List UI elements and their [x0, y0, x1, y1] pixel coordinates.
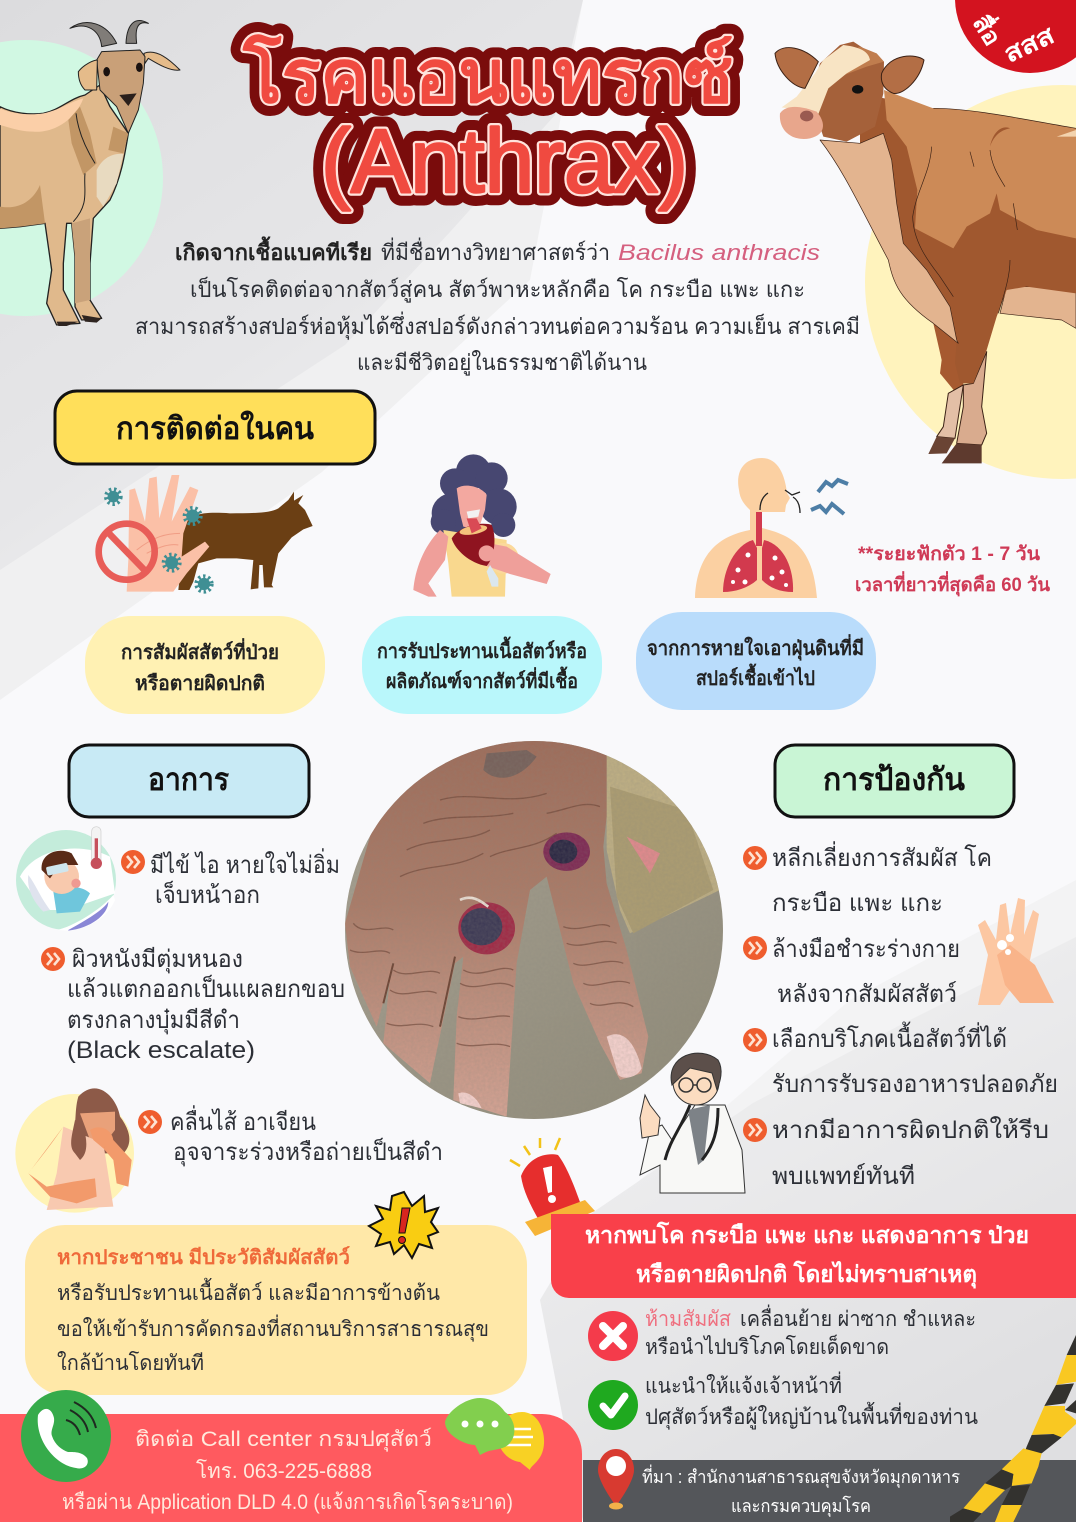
icon: phone: [21, 1390, 111, 1482]
symptoms text: แล้วแตกออกเป็นแผลยกขอบ: [67, 974, 345, 1003]
mint circle behind goat: [0, 40, 163, 316]
card: contact: หรือตายผิดปกติ: [135, 672, 265, 695]
card: inhalation: สปอร์เชื้อเข้าไป: [696, 663, 815, 690]
card: inhalation: จากการหายใจเอาฝุ่นดินที่มี: [647, 633, 864, 661]
text: prohibited actions: เคลื่อนย้าย ผ่าซาก ชำแหละ: [740, 1304, 976, 1331]
icon: warning burst: [369, 1192, 438, 1258]
badge: source: สื่อ: [967, 8, 1010, 51]
prevention text: เลือกบริโภคเนื้อสัตว์ที่ได้: [772, 1021, 1007, 1053]
icon: map pin: [598, 1449, 634, 1510]
intro text block: และมีชีวิตอยู่ในธรรมชาติได้นาน: [357, 350, 647, 376]
card: public advice: หรือรับประทานเนื้อสัตว์ และมีอาการข้างต้น: [57, 1278, 440, 1305]
intro text block: [135, 236, 860, 376]
text: prohibited actions: [645, 1304, 976, 1359]
intro text block: เป็นโรคติดต่อจากสัตว์สู่คน สัตว์พาหะหลักคือ โค กระบือ แพะ แกะ: [190, 275, 805, 303]
prevention text: หลังจากสัมผัสสัตว์: [777, 980, 957, 1008]
title: (Anthrax): [321, 112, 688, 212]
card: public advice: ขอให้เข้ารับการคัดกรองที่สถานบริการสาธารณสุข: [57, 1314, 489, 1342]
card: public advice: ใกล้บ้านโดยทันที: [57, 1351, 204, 1375]
prevention text: [772, 841, 1058, 1190]
icon: child with fever: [16, 827, 116, 931]
panel: source footer: [583, 1460, 1076, 1522]
heading: prevention: [775, 745, 1014, 817]
card: contact: การสัมผัสสัตว์ที่ป่วย: [121, 637, 279, 664]
card: eating: ผลิตภัณฑ์จากสัตว์ที่มีเชื้อ: [386, 666, 578, 693]
title: (Anthrax): [321, 112, 688, 212]
panel: warning heading: [551, 1214, 1076, 1298]
card: eating: [362, 616, 602, 714]
prevention text: ล้างมือชำระร่างกาย: [772, 936, 960, 963]
badge: source: สสส: [1000, 21, 1059, 68]
icon: woman eating raw meat: [413, 454, 551, 597]
text: recommended action: [645, 1371, 978, 1430]
panel: contact footer: โทร. 063-225-6888: [196, 1459, 372, 1483]
illustration: cow: [775, 42, 1076, 463]
panel: contact footer: [0, 1414, 582, 1522]
heading: transmission: การติดต่อในคน: [116, 410, 314, 446]
card: contact: [85, 616, 325, 714]
card: eating: การรับประทานเนื้อสัตว์หรือ: [377, 636, 587, 663]
heading: symptoms: [69, 745, 309, 817]
prevention text: พบแพทย์ทันที: [772, 1162, 915, 1190]
intro text block: Bacilus anthracis: [618, 240, 820, 265]
panel: contact footer: ติดต่อ Call center กรมปศุสัตว์: [135, 1427, 432, 1452]
prevention text: กระบือ แพะ แกะ: [772, 890, 943, 917]
panel: source footer: ที่มา : สำนักงานสาธารณสุขจังหวัดมุกดาหาร: [642, 1464, 960, 1488]
symptoms text: ตรงกลางบุ๋มมีสีดำ: [67, 1007, 240, 1035]
card: public advice: หากประชาชน มีประวัติสัมผัสสัตว์: [57, 1246, 350, 1269]
intro text block: ที่มีชื่อทางวิทยาศาสตร์ว่า: [381, 237, 610, 265]
text: recommended action: แนะนำให้แจ้งเจ้าหน้าที่: [645, 1371, 842, 1398]
icon: chat bubbles: [445, 1398, 544, 1470]
photo: hand with anthrax lesions: [345, 741, 723, 1119]
prevention text: หากมีอาการผิดปกติให้รีบ: [772, 1116, 1049, 1144]
icon: check mark: [588, 1380, 638, 1430]
note: incubation period: **ระยะฟักตัว 1 - 7 วัน: [858, 544, 1040, 565]
icon: hand, no-touch and cow: [99, 475, 313, 592]
prevention text: หลีกเลี่ยงการสัมผัส โค: [772, 841, 992, 872]
note: incubation period: [855, 544, 1050, 597]
title: โรคแอนแทรกซ์: [243, 35, 733, 118]
heading: transmission: [55, 391, 375, 464]
illustration: doctor: [640, 1053, 745, 1193]
card: public advice: [25, 1225, 527, 1395]
intro text block: สามารถสร้างสปอร์ห่อหุ้มได้ซึ่งสปอร์ดังกล่าวทนต่อความร้อน ความเย็น สารเคมี: [135, 311, 860, 340]
text: recommended action: ปศุสัตว์หรือผู้ใหญ่บ้านในพื้นที่ของท่าน: [645, 1402, 978, 1430]
icon: prohibited cross: [588, 1311, 638, 1361]
text: prohibited actions: หรือนำไปบริโภคโดยเด็ดขาด: [645, 1333, 889, 1359]
icon: red siren: [510, 1138, 595, 1236]
symptoms text: คลื่นไส้ อาเจียน: [170, 1105, 316, 1136]
illustration: goat: [0, 21, 180, 326]
yellow circle behind cow: [865, 85, 1076, 479]
badge: source: [955, 0, 1076, 73]
symptoms text: เจ็บหน้าอก: [155, 880, 260, 909]
hazard tape: [950, 1335, 1076, 1522]
bullet icons: [41, 846, 767, 1142]
symptoms text: อุจจาระร่วงหรือถ่ายเป็นสีดำ: [173, 1137, 443, 1167]
heading: prevention: การป้องกัน: [823, 762, 965, 797]
intro text block: เกิดจากเชื้อแบคทีเรีย: [175, 236, 372, 265]
symptoms text: ผิวหนังมีตุ่มหนอง: [72, 946, 243, 974]
title: โรคแอนแทรกซ์: [243, 35, 733, 118]
title: (Anthrax): [321, 112, 688, 212]
heading: symptoms: อาการ: [148, 762, 229, 797]
note: incubation period: เวลาที่ยาวที่สุดคือ 60 วัน: [855, 571, 1050, 597]
prevention text: รับการรับรองอาหารปลอดภัย: [772, 1071, 1058, 1098]
panel: source footer: และกรมควบคุมโรค: [731, 1495, 871, 1517]
panel: contact footer: หรือผ่าน Application DLD 4.0 (แจ้งการเกิดโรคระบาด): [62, 1490, 513, 1514]
panel: warning heading: หากพบโค กระบือ แพะ แกะ แสดงอาการ ป่วย: [585, 1221, 1029, 1248]
symptoms text: [67, 848, 443, 1167]
symptoms text: (Black escalate): [67, 1037, 255, 1064]
text: prohibited actions: ห้ามสัมผัส: [645, 1308, 731, 1331]
symptoms text: มีไข้ ไอ หายใจไม่อิ่ม: [150, 848, 340, 879]
panel: warning heading: หรือตายผิดปกติ โดยไม่ทราบสาเหตุ: [636, 1260, 977, 1289]
icon: lungs with inhaled spores: [695, 458, 848, 598]
title: โรคแอนแทรกซ์: [243, 35, 733, 118]
title: [243, 35, 733, 212]
icon: washing hands: [978, 898, 1054, 1005]
icon: woman feeling nauseous: [15, 1088, 134, 1213]
card: inhalation: [636, 612, 876, 710]
